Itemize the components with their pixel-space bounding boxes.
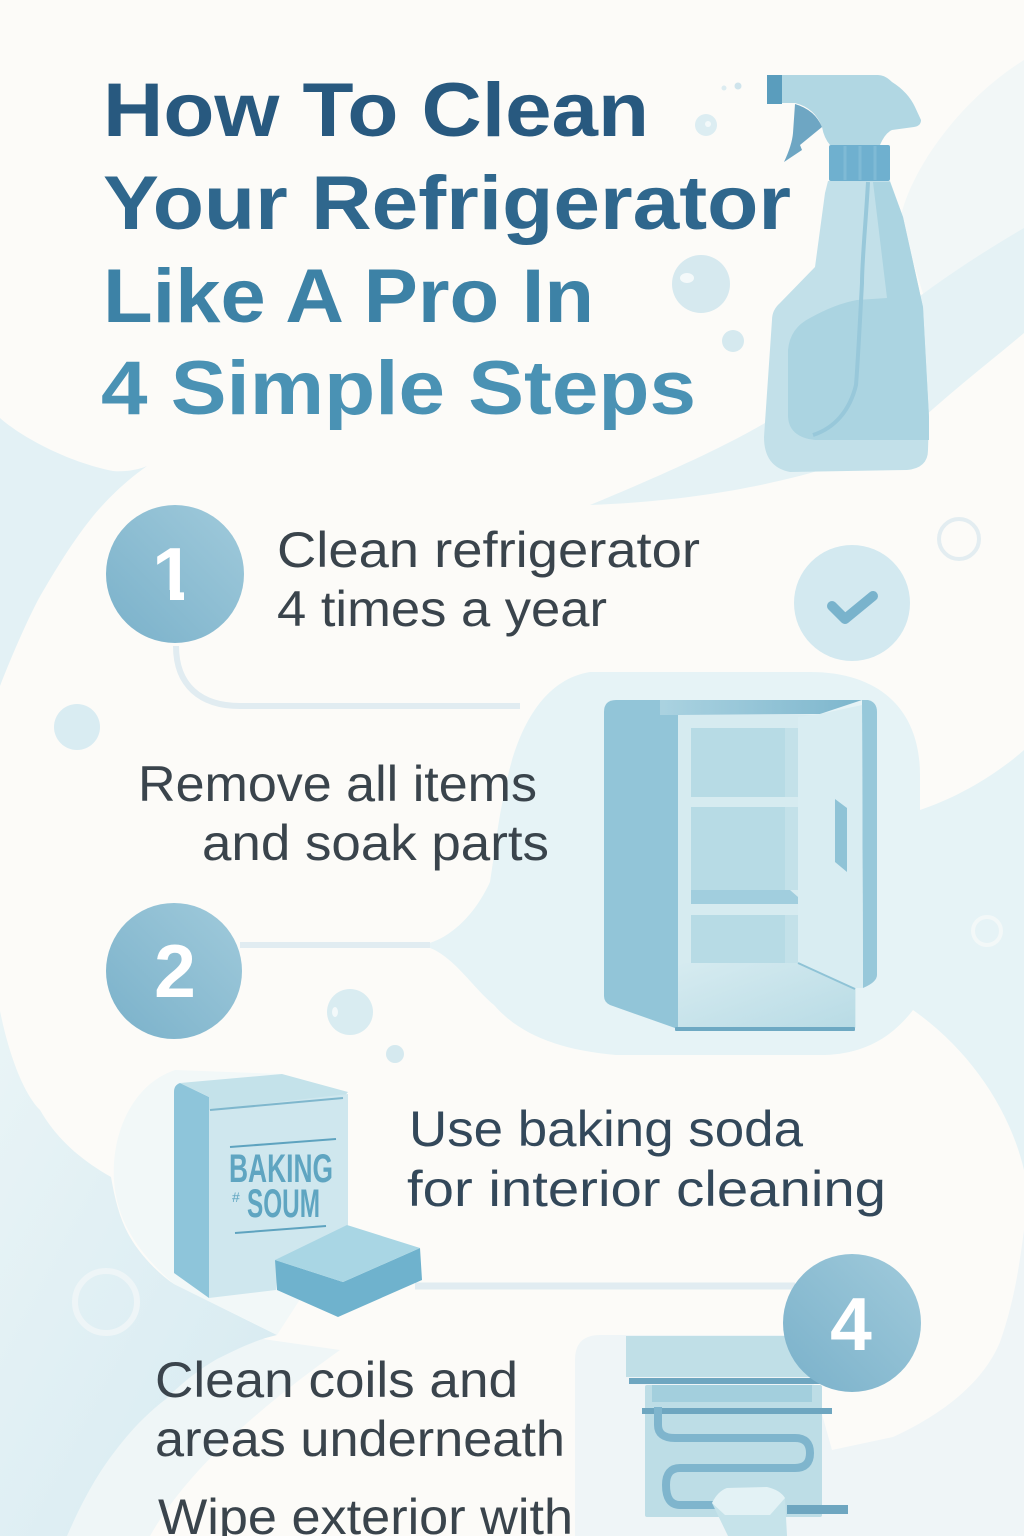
icon: baking soda box <box>174 1074 348 1298</box>
step 2 badge <box>106 903 242 1039</box>
title <box>101 68 791 431</box>
connector: step 1 to step 2 text <box>176 646 520 706</box>
step 3 text: for interior cleaning <box>407 1161 886 1217</box>
step 4 text: Clean coils and <box>155 1352 518 1408</box>
icon: refrigerator coils <box>626 1336 848 1536</box>
icon: open refrigerator <box>604 700 877 1031</box>
step 4 text <box>155 1352 565 1467</box>
icon: baking soda box: SOUM <box>247 1182 320 1226</box>
step 3 text: Use baking soda <box>409 1101 803 1157</box>
title: 4 Simple Steps <box>101 346 696 431</box>
icon: sponge <box>275 1225 422 1317</box>
connector: step 2 <box>240 942 430 948</box>
decorative rings and dots <box>54 519 1001 1333</box>
step 2 text: and soak parts <box>202 815 549 871</box>
step 1 badge: 1 <box>152 532 194 616</box>
step 1 text: Clean refrigerator <box>277 522 700 578</box>
title: How To Clean <box>103 68 649 153</box>
connector: step 3 to step 4 <box>415 1282 795 1290</box>
step 2 text: Remove all items <box>138 756 537 812</box>
title: Your Refrigerator <box>103 161 791 246</box>
step 1 badge <box>106 505 244 643</box>
step 1 text: 4 times a year <box>277 581 607 637</box>
step 2 badge: 2 <box>154 929 196 1013</box>
icon: check mark badge <box>794 545 910 661</box>
icon: baking soda box: # <box>232 1189 240 1205</box>
step 4 text: areas underneath <box>155 1411 565 1467</box>
step 4 badge: 4 <box>830 1282 872 1366</box>
step 1 text <box>277 522 700 637</box>
decorative bubbles near title <box>672 82 744 352</box>
icon: spray bottle <box>764 75 929 472</box>
step 4 badge <box>783 1254 921 1392</box>
title: Like A Pro In <box>103 254 594 339</box>
step 3 text <box>407 1101 886 1217</box>
icon: baking soda box: BAKING <box>229 1147 333 1191</box>
step 2 text <box>138 756 549 871</box>
